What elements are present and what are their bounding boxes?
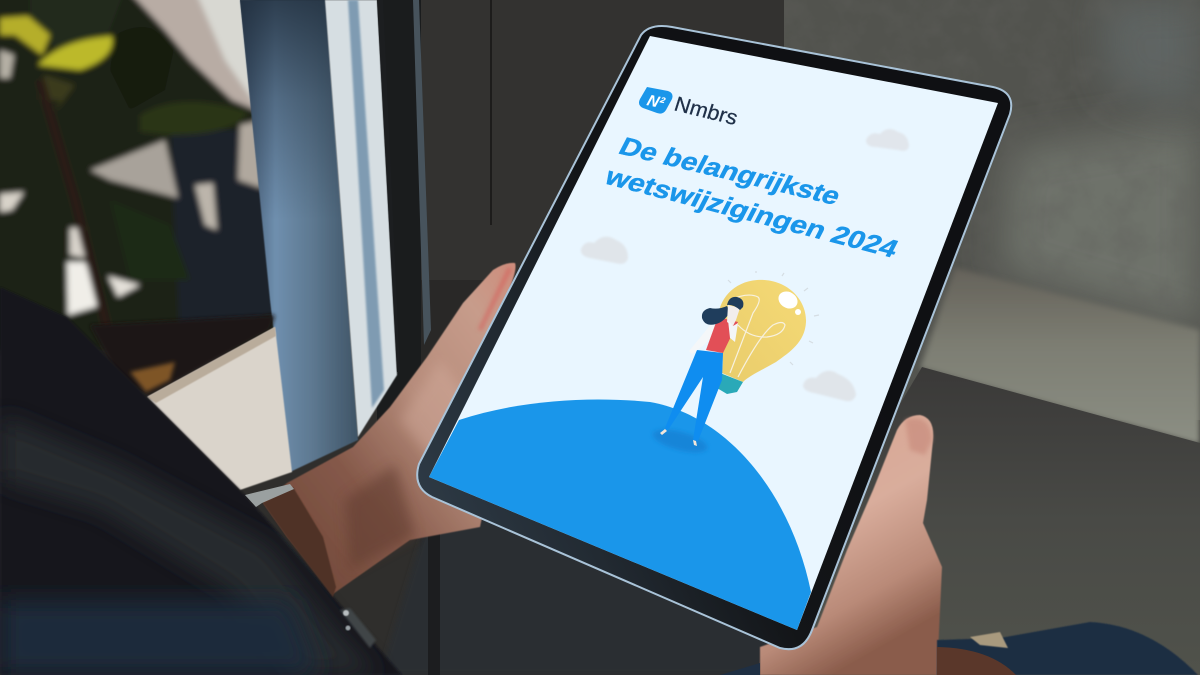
hair [727, 297, 743, 310]
face [727, 305, 740, 326]
tablet body [417, 26, 1011, 649]
concrete ledge [920, 268, 1200, 445]
forearm [728, 320, 738, 342]
filament [730, 295, 785, 377]
right hand [760, 415, 942, 675]
leaves [140, 102, 248, 135]
plant [0, 0, 290, 375]
watch strap [245, 484, 336, 597]
pale light behind plant [128, 0, 256, 110]
window frame and blue column [240, 0, 400, 472]
title [599, 132, 904, 263]
hill [429, 399, 811, 630]
dark wall behind plant [170, 130, 290, 340]
cloud: right of bulb [803, 371, 856, 401]
left hand [263, 263, 516, 594]
logo icon [639, 87, 672, 114]
logo [639, 87, 740, 130]
dark door [420, 0, 784, 300]
jeans [720, 622, 1198, 675]
trousers [665, 350, 723, 441]
ponytail [702, 306, 730, 325]
background wall and floor [377, 0, 1200, 675]
light bulb [718, 280, 806, 382]
tablet screen [429, 36, 998, 630]
floor [760, 367, 1200, 675]
red top [706, 317, 738, 353]
feet [660, 429, 697, 446]
arm [689, 323, 718, 354]
title: De belangrijkste [614, 132, 846, 210]
cloud: top right [866, 129, 909, 151]
logo wordmark: Nmbrs [671, 93, 740, 130]
bulb rays [728, 271, 819, 365]
planter [90, 315, 292, 490]
stem [40, 80, 122, 375]
bulb base [717, 373, 743, 394]
logo: N² [645, 93, 667, 112]
bulb highlights [775, 288, 801, 312]
title: wetswijzigingen 2024 [599, 161, 904, 263]
tablet [417, 26, 1011, 649]
soil [90, 315, 275, 396]
foot shadow [651, 425, 709, 457]
cloud: middle left [581, 237, 628, 264]
sleeve of the person [0, 287, 402, 675]
illustration: woman with light bulb [651, 271, 819, 457]
